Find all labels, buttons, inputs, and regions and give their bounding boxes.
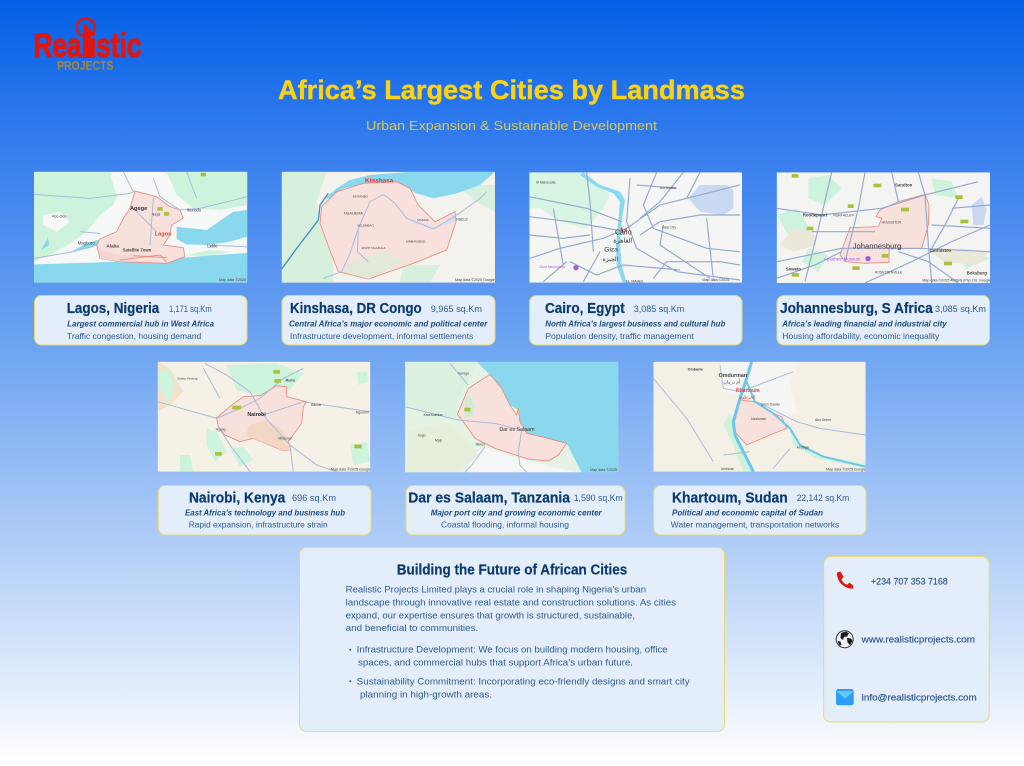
map: Lagos: Agege <box>130 206 147 212</box>
text block: intro <box>346 585 677 633</box>
map: Nairobi: Ngurumi <box>356 410 369 414</box>
info card: Nairobi: Rapid expansion, infrastructure strain <box>189 520 328 530</box>
map: Khartoum: Al Bager <box>797 445 810 449</box>
info card: Nairobi: East Africa’s technology and business hub <box>185 508 345 517</box>
info card: Johannesburg: Africa’s leading financial and industrial city <box>781 319 947 328</box>
panel: Lagos <box>34 172 247 345</box>
map: Kinshasa: Map data ©2025 Google <box>455 278 495 282</box>
map: Johannesburg: Roodepoort <box>803 213 828 218</box>
map: Lagos: Satellite Town <box>123 247 152 252</box>
bullet: infrastructure development <box>349 645 668 667</box>
map: Johannesburg: Apartheid Museum <box>824 257 861 262</box>
map: Lagos: Ikeja <box>152 212 161 217</box>
map: Cairo: الجيزة <box>603 256 619 263</box>
bullet: sustainability commitment: planning in high-growth areas. <box>360 689 492 699</box>
map: Khartoum: Umm Dawan <box>761 402 780 406</box>
map: Lagos: Map data ©2025 <box>219 278 246 282</box>
heading: Building the Future: Building the Future of African Cities <box>397 562 627 578</box>
icon: globe <box>836 631 853 648</box>
map: Cairo: Cairo <box>615 229 632 236</box>
map: Lagos: Ado Odo <box>52 215 66 219</box>
map: Cairo <box>529 172 742 283</box>
info card: Khartoum <box>654 486 866 535</box>
map: Lagos: Lekki <box>207 244 217 249</box>
info card: Khartoum: Water management, transportation networks <box>671 520 839 530</box>
info card: Khartoum: 22,142 sq.Km <box>797 493 849 504</box>
icon: phone <box>837 572 854 589</box>
map: Johannesburg: HOUGHTON <box>882 220 902 224</box>
map: Lagos <box>34 172 248 283</box>
panel: Building the Future <box>300 548 724 732</box>
map: Dar es Salaam: Map data ©2025 <box>590 468 617 472</box>
map: Lagos: Ikorodu <box>187 208 202 213</box>
map: Dar es Salaam: Kerege <box>458 371 469 375</box>
info card: Johannesburg: Housing affordability, economic inequality <box>782 331 940 341</box>
logo: Realistic Projects: PROJECTS <box>57 59 114 73</box>
info card: Dar es Salaam: Dar es Salaam, Tanzania <box>408 491 571 507</box>
panel: Dar es Salaam <box>405 362 625 535</box>
info card: Kinshasa: 9,965 sq.Km <box>431 304 482 315</box>
map: Lagos: Alaba <box>106 243 119 248</box>
map: Nairobi: Ramisi <box>311 403 321 407</box>
map: Cairo: EL MAADI <box>626 279 643 283</box>
map: Kinshasa: Kinshasa <box>365 178 394 185</box>
map: Khartoum: Abu Green <box>815 418 831 422</box>
map: Kinshasa: KINTAMBO <box>353 195 369 199</box>
info card: Dar es Salaam: Coastal flooding, informal housing <box>441 520 569 530</box>
info card: Cairo: 3,085 sq.Km <box>634 304 684 315</box>
map: Kinshasa: SELEMBAO <box>357 224 374 228</box>
map: Cairo: Ain Shams <box>660 186 676 190</box>
info card: Cairo: Cairo, Egypt <box>545 301 625 317</box>
map: Johannesburg: Soweto <box>786 267 801 272</box>
text block: intro: landscape through innovative real estate and construction solutions. As cities <box>346 598 677 608</box>
info card: Kinshasa <box>282 296 495 345</box>
phone number: +234 707 353 7168 <box>871 577 948 588</box>
info card: Khartoum: Political and economic capital of Sudan <box>672 508 823 517</box>
subtitle: Urban Expansion & Sustainable Development <box>366 118 657 133</box>
map: Nairobi: Map data ©2025 Google <box>331 467 371 471</box>
panel: Khartoum <box>653 362 866 535</box>
map: Khartoum: Alsalaman <box>751 417 766 421</box>
info card: Johannesburg <box>777 296 990 345</box>
info card: Lagos: Largest commercial hub in West Africa <box>67 319 214 328</box>
bullet: infrastructure development: spaces, and commercial hubs that support Africa’s urban future. <box>358 657 633 667</box>
map: Khartoum: الخرطوم <box>739 395 755 400</box>
text block: intro: and beneficial to communities. <box>346 623 478 633</box>
map: Johannesburg: ROSETTENVILLE <box>875 270 903 274</box>
title: Africa’s Largest Cities by Landmass <box>278 75 745 105</box>
map: Kinshasa: KIMBANSEKE <box>406 239 425 243</box>
info card: Nairobi <box>158 486 371 535</box>
email: info@realisticprojects.com <box>862 692 977 703</box>
map: Cairo: القاهرة <box>613 238 633 245</box>
map: Cairo: Map data ©2025 <box>702 278 729 282</box>
info card: Lagos: Lagos, Nigeria <box>67 301 160 317</box>
map: Khartoum <box>653 362 866 472</box>
map: Dar es Salaam: Mbezi <box>476 443 485 447</box>
panel: Nairobi <box>158 362 371 535</box>
map: Lagos: Lagos <box>155 231 171 237</box>
map: Dar es Salaam <box>405 362 618 472</box>
map: Cairo: Giza <box>604 247 618 254</box>
map: Kinshasa: MASINA <box>417 218 429 222</box>
map: Lagos: Magboro <box>78 240 95 245</box>
bullet: sustainability commitment: Sustainability Commitment: Incorporating eco-friendly designs and smart city <box>357 677 690 687</box>
map: Khartoum: Khartoum <box>736 388 760 394</box>
map: Dar es Salaam: Kwa Mathias <box>424 413 443 417</box>
map: Johannesburg: Map data ©2025 AfriGIS (Pty) Ltd, Google <box>922 279 991 283</box>
info card: Dar es Salaam <box>406 486 625 535</box>
logo: Realistic Projects: Realistic <box>34 27 142 65</box>
website: www.realisticprojects.com <box>861 635 975 646</box>
panel: Johannesburg <box>777 172 991 345</box>
info card: Johannesburg: 3,085 sq.Km <box>935 304 986 315</box>
map: Johannesburg: Johannesburg <box>853 242 901 251</box>
panel: Kinshasa <box>282 172 495 345</box>
map: Dar es Salaam: Mpiji <box>435 439 442 443</box>
info card: Nairobi: Nairobi, Kenya <box>189 491 286 507</box>
text block: intro: expand, our expertise ensures that growth is structured, sustainable, <box>346 610 635 620</box>
map: Khartoum: Ambarat <box>721 467 734 471</box>
info card: Kinshasa: Kinshasa, DR Congo <box>290 301 422 317</box>
map: Johannesburg: Boksburg <box>967 270 987 275</box>
panel: Cairo <box>529 172 742 345</box>
map: Nairobi: Ruiru <box>286 378 295 382</box>
icon: mail <box>836 689 854 705</box>
map: Dar es Salaam: Dar es Salaam <box>499 427 535 433</box>
logo: Realistic Projects <box>34 18 142 73</box>
map: Kinshasa: MONT NGAFULA <box>362 246 385 250</box>
map: Kinshasa <box>282 172 495 283</box>
map: Johannesburg <box>776 172 991 283</box>
info card: Cairo <box>530 296 742 345</box>
map: Cairo: Al Mansouria <box>536 181 556 185</box>
info card: Kinshasa: Infrastructure development, informal settlements <box>290 331 473 341</box>
info card: Cairo: Population density, traffic management <box>545 331 694 341</box>
map: Nairobi: Ewaso Kedong <box>177 376 198 380</box>
map: Khartoum: Map data ©2025 Google <box>826 467 866 471</box>
info card: Cairo: North Africa’s largest business and cultural hub <box>545 319 725 328</box>
map: Khartoum: Ombaria <box>688 367 703 371</box>
info card: Dar es Salaam: 1,590 sq.Km <box>574 493 623 504</box>
panel: contact <box>824 556 989 722</box>
map: Nairobi: Ngong <box>216 428 226 432</box>
map: Nairobi: Nairobi <box>247 412 266 418</box>
info card: Lagos: Traffic congestion, housing demand <box>67 331 202 341</box>
info card: Lagos: 1,171 sq.Km <box>169 304 212 315</box>
map: Khartoum: أم درمان <box>723 378 741 386</box>
bullet: infrastructure development: Infrastructure Development: We focus on building modern housing, office <box>357 645 668 655</box>
map: Cairo: Nasr City <box>662 225 676 229</box>
info card: Kinshasa: Central Africa’s major economic and political center <box>289 319 488 328</box>
info card: Lagos <box>34 296 247 345</box>
info card: Nairobi: 696 sq.Km <box>292 493 336 504</box>
map: Nairobi <box>158 362 371 472</box>
map: Kinshasa: NSELE <box>456 217 469 221</box>
map: Cairo: Giza Necropolis <box>539 265 565 269</box>
map: Johannesburg: Sandton <box>895 182 913 187</box>
map: Johannesburg: Germiston <box>930 248 952 253</box>
map: Nairobi: Mlolongo <box>278 437 292 441</box>
map: Kinshasa: NGALIEMA <box>344 211 363 215</box>
map: Johannesburg: NORTHCLIFF <box>833 214 854 218</box>
info card: Dar es Salaam: Major port city and growing economic center <box>431 508 602 517</box>
bullet: sustainability commitment <box>349 677 690 699</box>
map: Dar es Salaam: Sogo <box>418 433 426 437</box>
info card: Khartoum: Khartoum, Sudan <box>672 491 788 507</box>
text block: intro: Realistic Projects Limited plays a crucial role in shaping Nigeria’s urban <box>346 585 646 595</box>
info card: Johannesburg: Johannesburg, S Africa <box>780 301 934 317</box>
map: Khartoum: Omdurman <box>719 373 747 379</box>
